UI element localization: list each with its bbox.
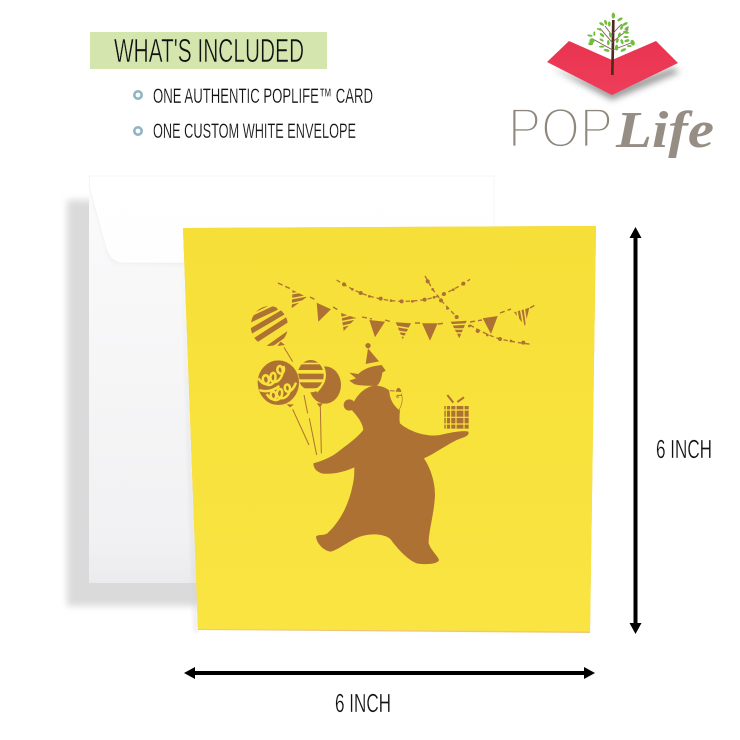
list item: envelope: ONE CUSTOM WHITE ENVELOPE [153,120,356,143]
bear snout details [390,388,402,410]
card shadow [181,230,199,632]
bunting string [278,283,537,324]
list item: card: ONE AUTHENTIC POPLIFE™ CARD [153,85,373,108]
arrow: width dimension [184,667,595,679]
list item: envelope [134,120,356,143]
envelope flap [89,176,494,263]
envelope [67,176,494,606]
logo wordmark: POP [508,96,613,159]
card face [183,226,596,632]
card [181,226,596,633]
label: width: 6 INCH [335,688,391,718]
envelope flap shadow [96,200,400,272]
bead garland [337,276,532,345]
bird [349,365,386,386]
gift box [444,395,469,429]
logo wordmark: Life [615,102,714,159]
logo wordmark [508,96,714,159]
balloon: swirls [257,360,299,407]
balloon: horizontal stripes [298,360,326,392]
card base [183,226,596,633]
bear [313,386,469,564]
balloon: solid [309,366,341,407]
list item: card [134,85,373,108]
icon: tree [587,13,636,75]
gift ribbon [447,395,464,403]
heading: what's included [90,32,327,69]
arrow: height dimension [630,227,642,634]
icon: open book [547,41,680,100]
balloon strings [293,395,321,455]
balloon: striped diagonal [248,303,293,362]
party hat [365,343,379,364]
bunting and garlands [278,276,537,345]
logo: PopLife [508,13,714,159]
heading: what's included: WHAT'S INCLUDED [114,32,304,69]
flag stripes [290,291,527,337]
label: height: 6 INCH [656,434,712,464]
list: included items [134,85,373,143]
envelope shadow [67,200,467,606]
balloons [248,303,341,455]
bird with party hat [349,343,386,386]
envelope body [89,176,494,583]
flags [290,290,529,341]
